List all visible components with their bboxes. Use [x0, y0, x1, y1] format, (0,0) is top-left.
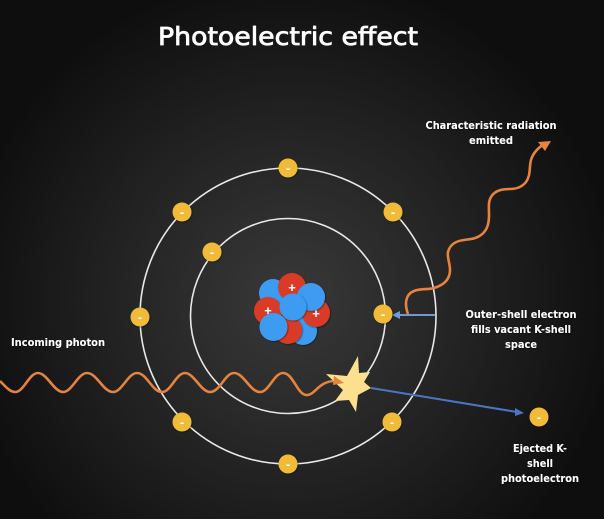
- label: outer-shell electron: Outer-shell electron: [466, 309, 576, 321]
- photon arrowhead: [333, 376, 344, 385]
- incoming photon wave: [0, 373, 335, 395]
- label: characteristic radiation: Characteristic radiation: [426, 120, 556, 132]
- characteristic radiation wave: [406, 141, 551, 314]
- electron: outer lower right: [382, 412, 402, 432]
- electron: outer upper left: [172, 202, 192, 222]
- inner electron shell: [190, 218, 386, 414]
- label: ejected photoelectron: shell: [527, 458, 553, 470]
- nucleus: +: [312, 306, 320, 321]
- nucleus: +: [264, 303, 272, 318]
- label: characteristic radiation: [426, 120, 556, 147]
- electron: inner right: -: [381, 306, 385, 322]
- electron: outer upper left: -: [180, 204, 184, 220]
- electron: outer bottom: -: [286, 456, 290, 472]
- label: outer-shell electron: fills vacant K-shell: [471, 324, 571, 336]
- electron: outer upper right: [384, 202, 402, 222]
- electron: outer left: -: [138, 310, 142, 324]
- electron: ejected: [530, 408, 548, 426]
- electron: outer left: [130, 308, 150, 326]
- outer electron shell: [140, 168, 436, 464]
- electron: outer lower left: -: [180, 414, 184, 430]
- ejected photoelectron arrow: [371, 388, 524, 416]
- electron: inner upper left: -: [210, 244, 214, 260]
- title: Photoelectric effect: [158, 22, 418, 51]
- electron: outer lower right: -: [390, 414, 394, 430]
- electron: outer bottom: [278, 454, 298, 474]
- label: ejected photoelectron: Ejected K-: [513, 443, 567, 455]
- label: ejected photoelectron: [501, 443, 579, 485]
- nucleus: [254, 273, 330, 345]
- label: characteristic radiation: emitted: [469, 135, 513, 147]
- label: outer-shell electron: [466, 309, 576, 351]
- label: ejected photoelectron: photoelectron: [501, 473, 579, 485]
- label: outer-shell electron: space: [505, 339, 537, 351]
- electron: outer lower left: [172, 412, 192, 432]
- electron: inner right: [374, 304, 392, 324]
- electron fill arrow: [392, 311, 435, 319]
- interaction star: [326, 356, 371, 412]
- electron: outer top: -: [286, 160, 290, 176]
- electron: outer top: [278, 158, 298, 178]
- nucleus: +: [288, 280, 296, 295]
- electron: inner upper left: [202, 242, 222, 262]
- electron: outer upper right: -: [391, 204, 395, 220]
- electron: ejected: -: [537, 410, 541, 424]
- label: incoming photon: Incoming photon: [11, 337, 105, 349]
